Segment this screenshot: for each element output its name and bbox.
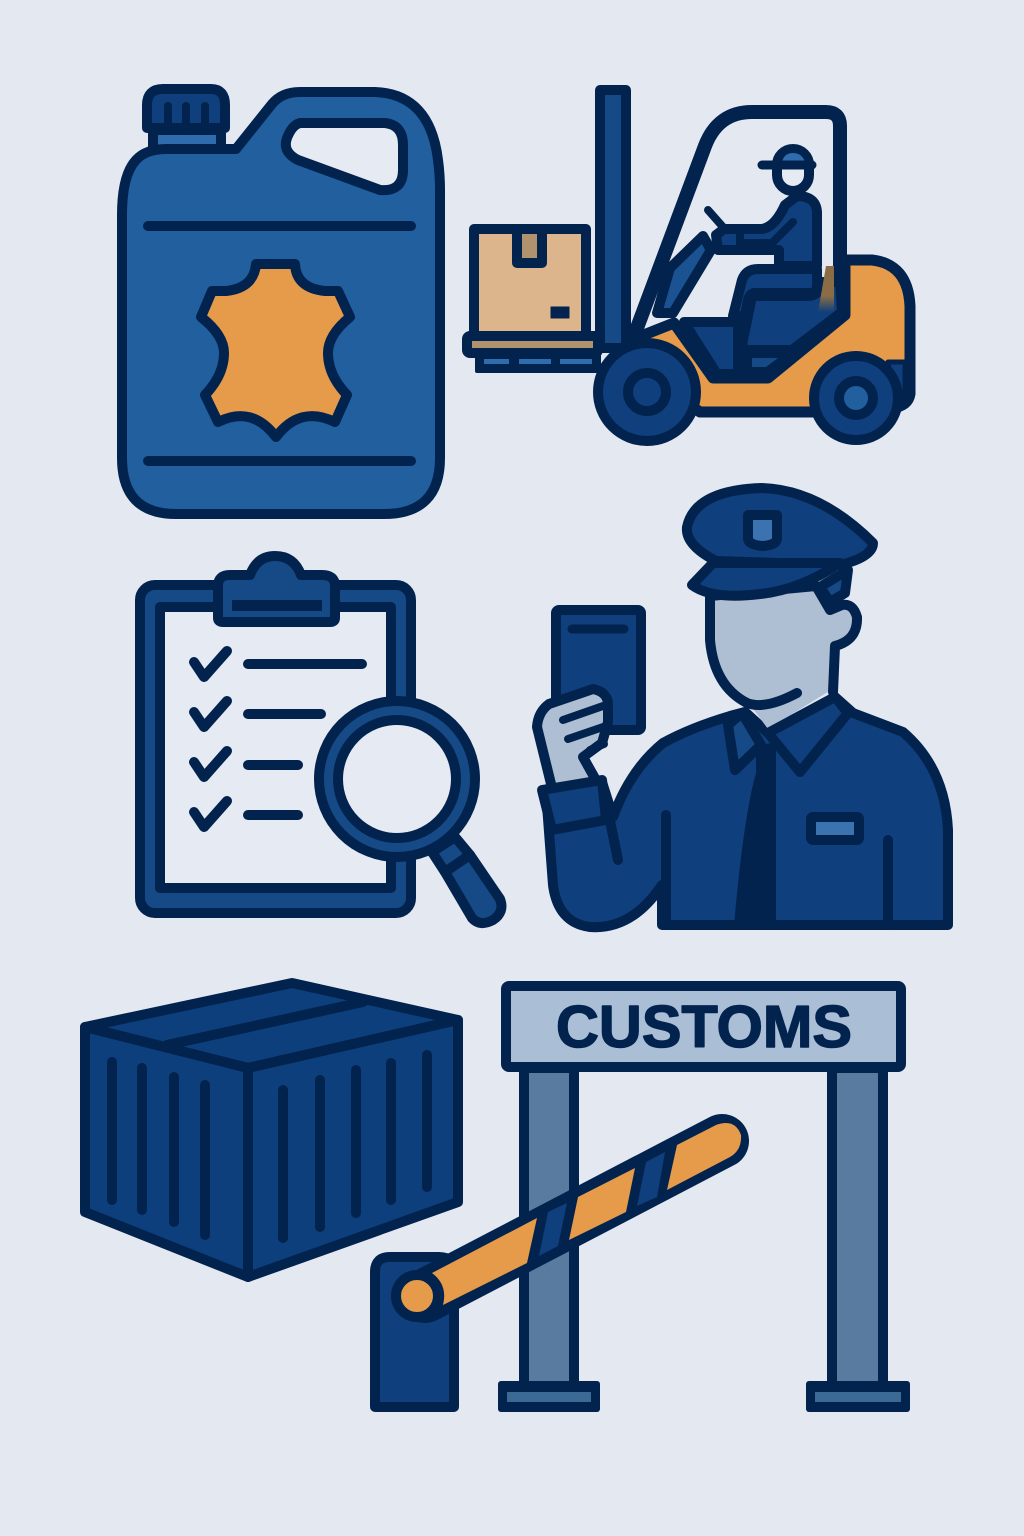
officer collar [728, 697, 848, 772]
uniform seams [602, 782, 888, 924]
jerrycan handle opening [286, 123, 403, 190]
front wheel [598, 343, 696, 441]
forklift mast [600, 90, 626, 348]
barrier post [375, 1257, 454, 1407]
rear bumper [888, 362, 905, 404]
officer torso [546, 697, 948, 927]
gate pillars [524, 1068, 883, 1386]
jerrycan cap [147, 89, 225, 150]
container top [85, 983, 458, 1068]
icon: checklist clipboard [140, 556, 501, 923]
officer face [710, 586, 857, 705]
clipboard board [140, 585, 411, 913]
clipboard clip [218, 556, 335, 622]
identity document [556, 610, 641, 730]
officer hand [537, 689, 608, 792]
name badge [811, 817, 859, 840]
clipboard paper [160, 607, 391, 888]
checklist items [194, 651, 362, 827]
container ribs [112, 1055, 427, 1238]
floor panel [684, 322, 738, 374]
icon: jerrycan with leather hide [122, 89, 440, 514]
magnifying glass [319, 701, 501, 923]
icon: customs gate with barrier [375, 986, 910, 1412]
pillar bases [498, 1381, 910, 1412]
cardboard box [474, 229, 586, 336]
customs sign [506, 986, 901, 1067]
container left side [85, 1027, 248, 1277]
rear wheel [814, 356, 898, 440]
pallet forks [467, 336, 599, 371]
dash panel [657, 236, 711, 313]
cab roll frame [634, 112, 840, 336]
seat base [733, 266, 845, 378]
icon: forklift with cargo box [467, 90, 910, 441]
jerrycan body [122, 92, 440, 514]
barrier arm [396, 1123, 741, 1317]
icon: shipping container [85, 983, 458, 1277]
icon: leather hide [201, 264, 350, 437]
customs sign: CUSTOMS [556, 994, 852, 1060]
officer neck [748, 660, 831, 729]
orange forklift body [636, 260, 910, 412]
container right side [248, 1020, 458, 1277]
officer hair [820, 570, 848, 602]
icon: customs officer with document [537, 488, 948, 927]
jerrycan ridges [148, 226, 411, 461]
officer cap [687, 488, 873, 596]
forklift driver [708, 149, 817, 266]
uniform cuff [542, 780, 606, 830]
officer tie [735, 743, 775, 926]
clip bar [232, 600, 322, 611]
